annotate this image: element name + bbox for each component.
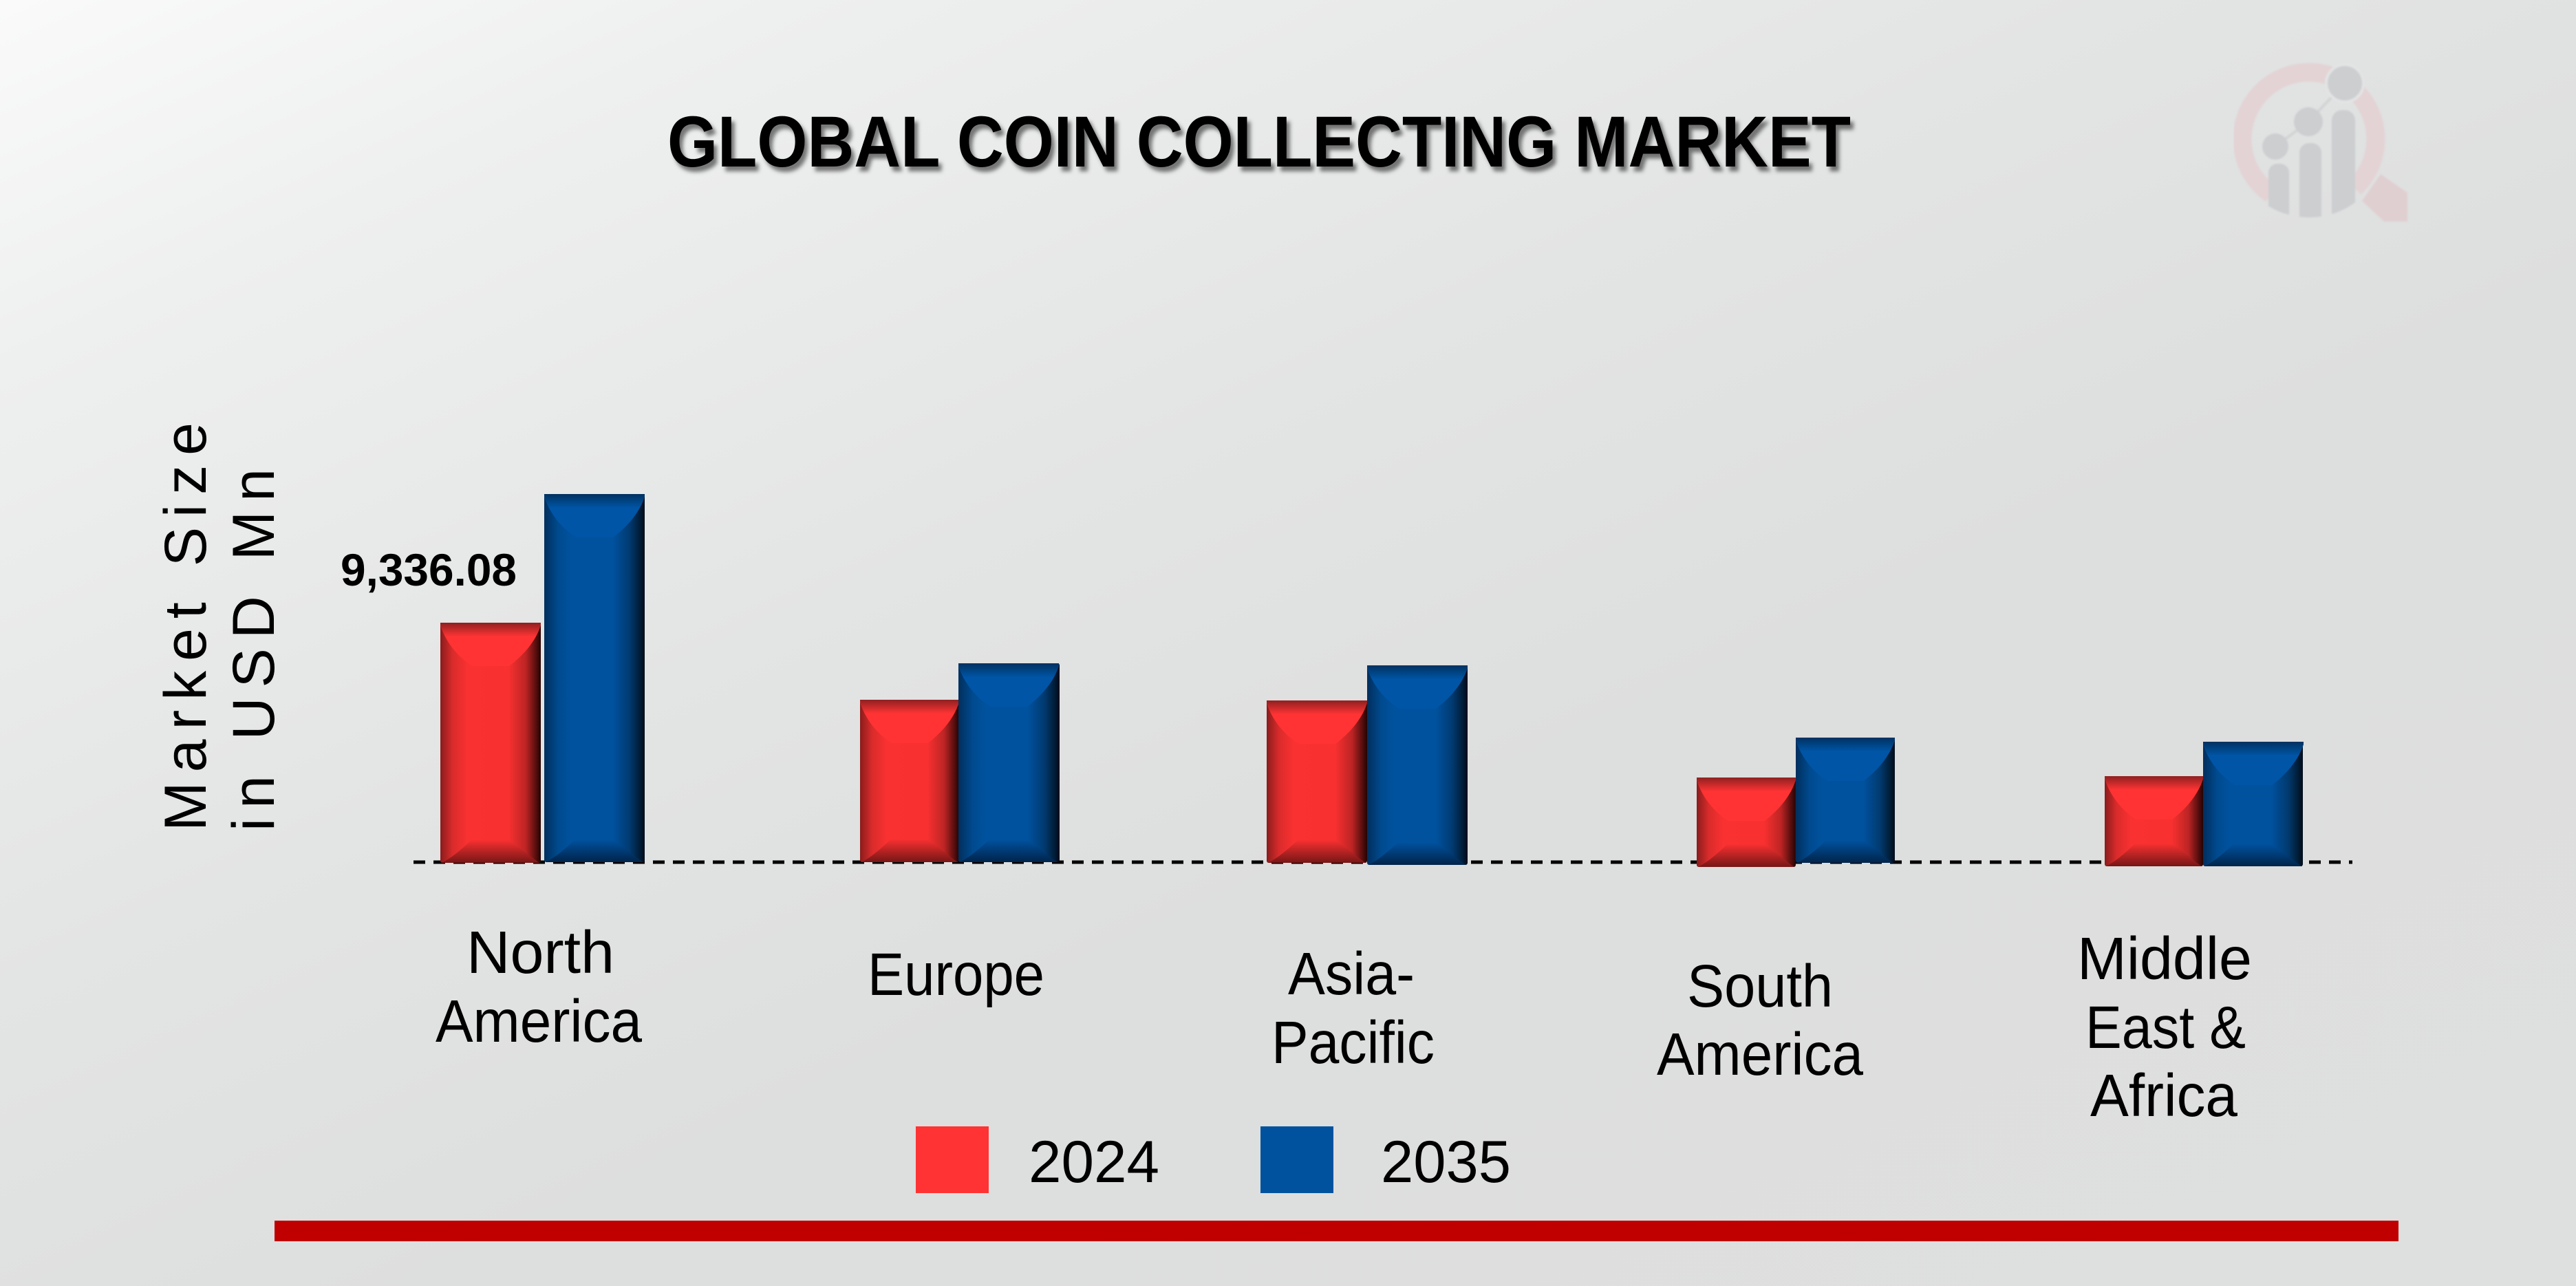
bar: Asia-Pacific 2035 — [1367, 665, 1468, 865]
title: GLOBAL COIN COLLECTING MARKET — [667, 102, 1851, 182]
category label: Asia-Pacific: Asia- — [1288, 941, 1415, 1007]
category label: North America: America — [436, 988, 643, 1055]
category label: Middle East and Africa: East & — [2085, 994, 2246, 1061]
bar: Europe 2035 — [958, 663, 1060, 862]
category label: North America — [436, 919, 643, 1055]
bar: North America 2024 — [440, 623, 541, 863]
footer red rule — [275, 1221, 2398, 1241]
category label: North America: North — [466, 919, 614, 986]
legend — [916, 1126, 1511, 1195]
bar: South America 2024 — [1697, 778, 1796, 867]
bar chart — [440, 494, 2304, 867]
bar: Middle East and Africa 2024 — [2105, 776, 2203, 866]
category label: Middle East and Africa: Middle — [2077, 925, 2252, 992]
category label: Asia-Pacific — [1271, 941, 1435, 1076]
category label: Middle East and Africa — [2077, 925, 2252, 1129]
category label: South America: South — [1687, 953, 1833, 1020]
value label: North America 2024: 9,336.08 — [341, 544, 517, 595]
legend item: 2035: 2035 — [1381, 1129, 1511, 1195]
category label: Asia-Pacific: Pacific — [1271, 1009, 1435, 1076]
baseline dashed axis — [414, 860, 2352, 864]
legend item: 2024 — [916, 1126, 1159, 1195]
category label: Middle East and Africa: Africa — [2090, 1062, 2238, 1129]
bar: Europe 2024 — [860, 700, 959, 862]
bar: North America 2035 — [544, 494, 645, 862]
bar: Asia-Pacific 2024 — [1267, 700, 1367, 863]
bar: South America 2035 — [1796, 738, 1895, 863]
category label: South America: America — [1657, 1021, 1864, 1088]
axis title: Market Size — [153, 422, 219, 831]
icon: logo magnifier with bars — [2242, 65, 2407, 227]
axis title: in USD Mn — [221, 469, 287, 831]
axis title — [153, 422, 287, 831]
legend item: 2035 — [1260, 1126, 1511, 1195]
bar: Middle East and Africa 2035 — [2203, 742, 2304, 866]
category label: South America — [1657, 953, 1864, 1088]
category label: Europe: Europe — [868, 941, 1044, 1008]
legend item: 2024: 2024 — [1029, 1129, 1159, 1195]
